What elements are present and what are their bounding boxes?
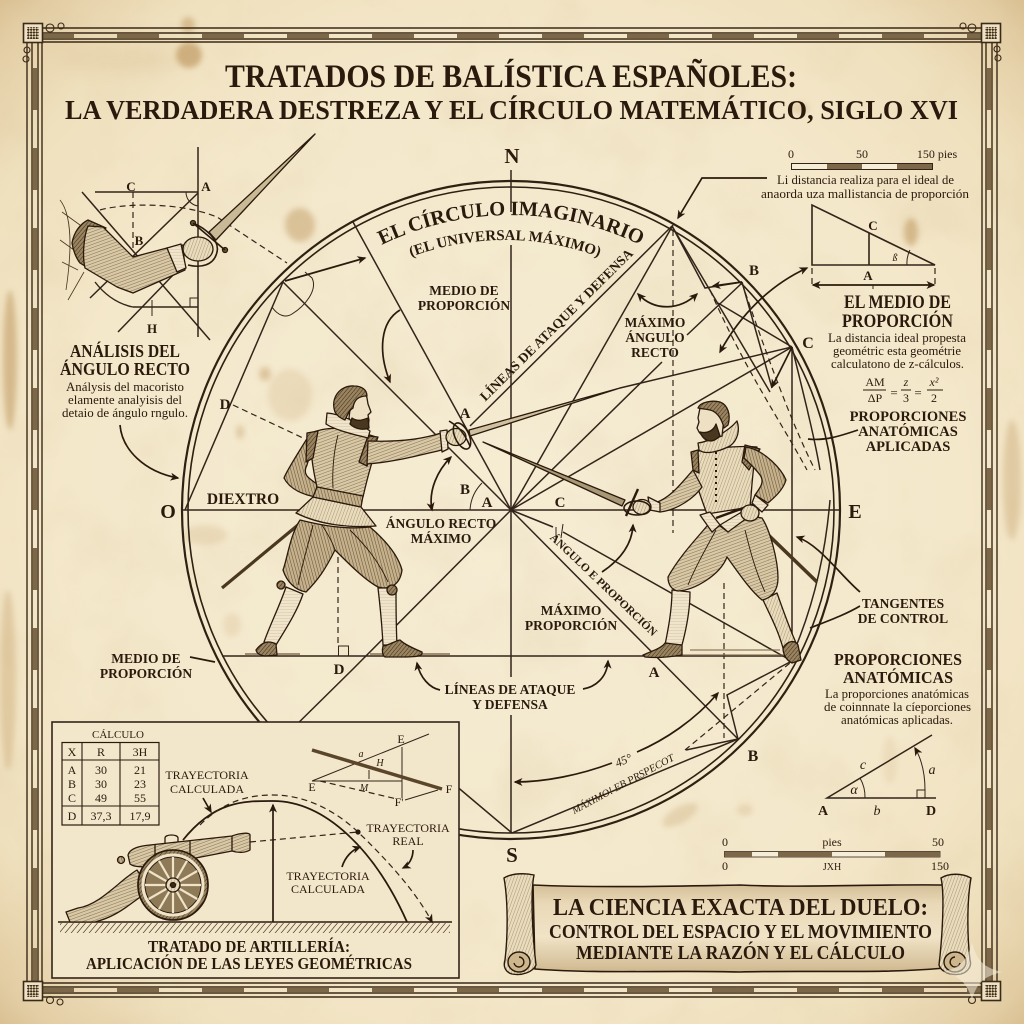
diagram text labels: PROPORCIÓN [418, 298, 510, 313]
circle labels: O [160, 501, 176, 523]
equation: x² [929, 375, 939, 389]
calculation table: 37,3 [90, 809, 112, 823]
circle labels: N [504, 144, 520, 168]
circle labels: D [220, 397, 231, 413]
calculation table: X [68, 745, 77, 759]
circle labels: A [482, 495, 493, 511]
banner text: MEDIANTE LA RAZÓN Y EL CÁLCULO [576, 942, 905, 964]
equation: = [914, 385, 922, 400]
geometric circle diagram [100, 144, 948, 867]
trajectory inset: E [308, 780, 316, 794]
circle labels: B [460, 482, 470, 498]
proportion triangle: A [863, 268, 873, 283]
head [697, 407, 724, 438]
banner text [549, 895, 932, 964]
diagram text labels: MÁXIMO [625, 315, 685, 330]
arm diagram letters: C [126, 179, 136, 194]
calculation table: 49 [95, 791, 107, 805]
trajectory labels: TRAYECTORIA [366, 821, 450, 835]
title: TRATADOS DE BALÍSTICA ESPAÑOLES: [225, 58, 797, 95]
arm diagram letters: H [147, 321, 157, 336]
trajectory labels [165, 768, 450, 896]
proportion triangle: ß [892, 253, 898, 264]
scale bar bottom: JXH [823, 862, 841, 873]
circle labels: C [555, 495, 565, 511]
calculation table: CÁLCULO [92, 729, 144, 741]
diagram text labels: RECTO [631, 345, 679, 360]
construction lines [183, 170, 840, 833]
diagram text labels: ÁNGULO RECTO [386, 516, 496, 531]
circle labels: S [506, 843, 518, 867]
circle labels: B [749, 263, 759, 279]
rapier hilt and blade [450, 420, 474, 452]
left fencer [222, 386, 620, 657]
right triangle diagram: b [874, 804, 880, 819]
trajectory inset: F' [395, 795, 403, 809]
diagram text labels: PROPORCIÓN [100, 666, 192, 681]
circle labels: DIEXTRO [207, 491, 279, 508]
heading: PROPORCIONES [834, 650, 962, 669]
heading: PROPORCIÓN [842, 310, 954, 332]
right triangle diagram: A [818, 804, 829, 819]
diagram text labels: MÁXIMO [541, 603, 601, 618]
diagram text labels: MÁXIMO [411, 531, 471, 546]
callout text [761, 172, 969, 201]
curved title: el círculo imaginario: (EL UNIVERSAL MÁXIMO) [410, 230, 600, 258]
right fencer [483, 401, 817, 663]
trajectory labels: REAL [392, 834, 424, 848]
description: La distancia ideal propesta [828, 330, 966, 345]
trajectories [183, 795, 432, 922]
circle labels: C [802, 335, 814, 352]
right triangle diagram: α [850, 783, 858, 798]
description: Análysis del macoristo [66, 380, 184, 394]
scale bar bottom: 150 [931, 859, 949, 873]
scale bar bottom: 0 [722, 835, 728, 849]
description [828, 330, 966, 371]
shoes [256, 642, 277, 656]
scroll banner [504, 874, 971, 975]
heading: ANATÓMICAS [843, 668, 953, 687]
shoes [643, 643, 682, 657]
diagram text labels: ÁNGULO E PROPORCIÓN [550, 534, 658, 636]
trajectory labels: TRAYECTORIA [286, 869, 370, 883]
circle labels: A [460, 406, 471, 422]
scale bar top: 150 pies [917, 147, 957, 161]
scale bar bottom: pies [822, 835, 842, 849]
calculation table: 30 [95, 763, 107, 777]
circle labels [160, 144, 862, 867]
legs [264, 587, 303, 645]
diagram text labels: TANGENTES [862, 596, 944, 611]
dashed construction lines [233, 230, 815, 750]
panel: tratado de artillería [52, 722, 459, 978]
scale bar top [788, 147, 957, 170]
trajectory inset: a [358, 749, 364, 760]
back arm [284, 437, 317, 497]
skirt and belt [296, 497, 376, 527]
trajectory inset: H [375, 758, 384, 769]
rapier blade [483, 442, 625, 506]
diagram text labels: Y DEFENSA [472, 697, 548, 712]
scale bar top: 50 [856, 147, 868, 161]
title: LA VERDADERA DESTREZA Y EL CÍRCULO MATEMÁTICO, SIGLO XVI [65, 95, 958, 125]
calculation table: 21 [134, 763, 146, 777]
equation: z [903, 375, 909, 389]
description: La proporciones anatómicas [825, 687, 969, 701]
trajectory labels: CALCULADA [291, 882, 365, 896]
circle labels: D [334, 662, 345, 678]
panel: análisis del ángulo recto [60, 134, 315, 420]
diagram text labels [100, 250, 948, 814]
description: calculatono de z-cálculos. [831, 356, 964, 371]
torso [692, 447, 757, 514]
diagram text labels: LÍNEAS DE ATAQUE Y DEFENSA [479, 250, 634, 402]
ruff [326, 413, 370, 438]
diagram text labels: DE CONTROL [858, 611, 948, 626]
diagram text labels: MEDIO DE [429, 283, 499, 298]
trajectory labels: CALCULADA [170, 782, 244, 796]
scale bar bottom: 50 [932, 835, 944, 849]
legs [665, 590, 690, 645]
sword arm [367, 433, 442, 464]
heading: ÁNGULO RECTO [60, 358, 190, 379]
diagram text labels: MEDIO DE [111, 651, 181, 666]
calculation table: A [68, 763, 77, 777]
head [349, 391, 371, 428]
calculation table: B [68, 777, 76, 791]
anatomical label: ANATÓMICAS [858, 423, 958, 440]
anatomical label [850, 409, 966, 455]
ground [58, 922, 452, 933]
breeches [283, 520, 402, 592]
circle labels: B [748, 748, 759, 765]
ground shadow [680, 650, 790, 655]
callout text: anaorda uza mallistancia de proporción [761, 186, 969, 201]
cannon [66, 833, 250, 922]
calculation table: R [97, 745, 105, 759]
arm diagram letters: A [201, 179, 211, 194]
description: detaio de ángulo rngulo. [62, 406, 188, 420]
banner text: LA CIENCIA EXACTA DEL DUELO: [553, 895, 928, 921]
description: de coinnnate la cíeporciones [824, 700, 971, 714]
equation: ΔP [868, 391, 883, 405]
diagram text labels: 45° [613, 751, 634, 770]
proportion triangle [812, 205, 935, 289]
trajectory inset [308, 732, 453, 809]
calculation table: C [68, 791, 76, 805]
description [62, 380, 188, 420]
right triangle diagram: D [926, 804, 936, 819]
scabbard sword [760, 527, 817, 582]
description: elamente analyisis del [68, 393, 183, 407]
arm diagram letters: B [135, 233, 144, 248]
circle labels: E [848, 501, 862, 523]
tabs and belt [700, 510, 747, 532]
sword arm [655, 470, 702, 512]
calculation table: 23 [134, 777, 146, 791]
calculation table: 30 [95, 777, 107, 791]
panel caption: TRATADO DE ARTILLERÍA: [148, 937, 350, 956]
calculation table: 3H [133, 745, 148, 759]
diagram text labels: MÁXIMO! EB PRSPECOT [572, 754, 674, 814]
calculation table: 55 [134, 791, 146, 805]
right triangle diagram [818, 735, 936, 819]
diagram text labels: ÁNGULO [625, 330, 685, 345]
arm diagram letters [126, 179, 211, 336]
equation: = [890, 385, 898, 400]
arm with rapier [60, 134, 315, 300]
description [824, 687, 971, 727]
arm geometry [82, 147, 210, 340]
left roller [504, 874, 536, 975]
right angle marks and arcs [272, 272, 563, 656]
heading [834, 650, 962, 687]
heading [60, 340, 190, 379]
heading [842, 293, 954, 332]
back arm [744, 447, 786, 503]
equation: AM [865, 375, 885, 389]
heading: EL MEDIO DE [844, 293, 951, 313]
calculation table [62, 729, 159, 825]
anatomical label: PROPORCIONES [850, 409, 966, 425]
diagram arrows [120, 178, 860, 782]
ground shadow [245, 653, 450, 655]
curved title: el círculo imaginario: EL CÍRCULO IMAGINARIO [376, 202, 644, 245]
panel caption: APLICACIÓN DE LAS LEYES GEOMÉTRICAS [86, 954, 412, 973]
scabbard sword [222, 525, 298, 588]
scale bar bottom [722, 835, 949, 873]
equation: 3 [903, 391, 909, 405]
trajectory inset: E [397, 732, 405, 746]
right triangle diagram: a [928, 763, 936, 778]
description: geométric esta geométrie [833, 343, 961, 358]
proportion triangle: C [868, 218, 878, 233]
breeches [668, 515, 778, 600]
right roller [939, 874, 971, 975]
equation: 2 [931, 391, 937, 405]
description: anatómicas aplicadas. [841, 713, 953, 727]
calculation table: D [68, 809, 77, 823]
banner text: CONTROL DEL ESPACIO Y EL MOVIMIENTO [549, 922, 932, 943]
diagram text labels: PROPORCIÓN [525, 618, 617, 633]
trajectory inset: F [446, 782, 453, 796]
trajectory labels: TRAYECTORIA [165, 768, 249, 782]
ruff [698, 421, 738, 453]
trajectory inset: M [359, 783, 369, 794]
calculation table: 17,9 [130, 809, 150, 823]
imaginary circle double ring [182, 181, 840, 839]
right triangle diagram: c [860, 758, 867, 773]
scale bar bottom: 0 [722, 859, 728, 873]
equation [863, 375, 943, 405]
callout text: Li distancia realiza para el ideal de [777, 172, 954, 187]
panel caption [86, 937, 412, 973]
circle labels: A [649, 665, 660, 681]
heading: ANÁLISIS DEL [70, 340, 180, 361]
diagram text labels: LÍNEAS DE ATAQUE [445, 682, 575, 697]
panel: el medio de proporción [761, 147, 969, 455]
anatomical label: APLICADAS [866, 439, 950, 455]
torso [311, 428, 378, 497]
scale bar top: 0 [788, 147, 794, 161]
title [65, 58, 958, 125]
panel: proporciones anatómicas [722, 650, 971, 873]
watermark star [942, 942, 1002, 1000]
